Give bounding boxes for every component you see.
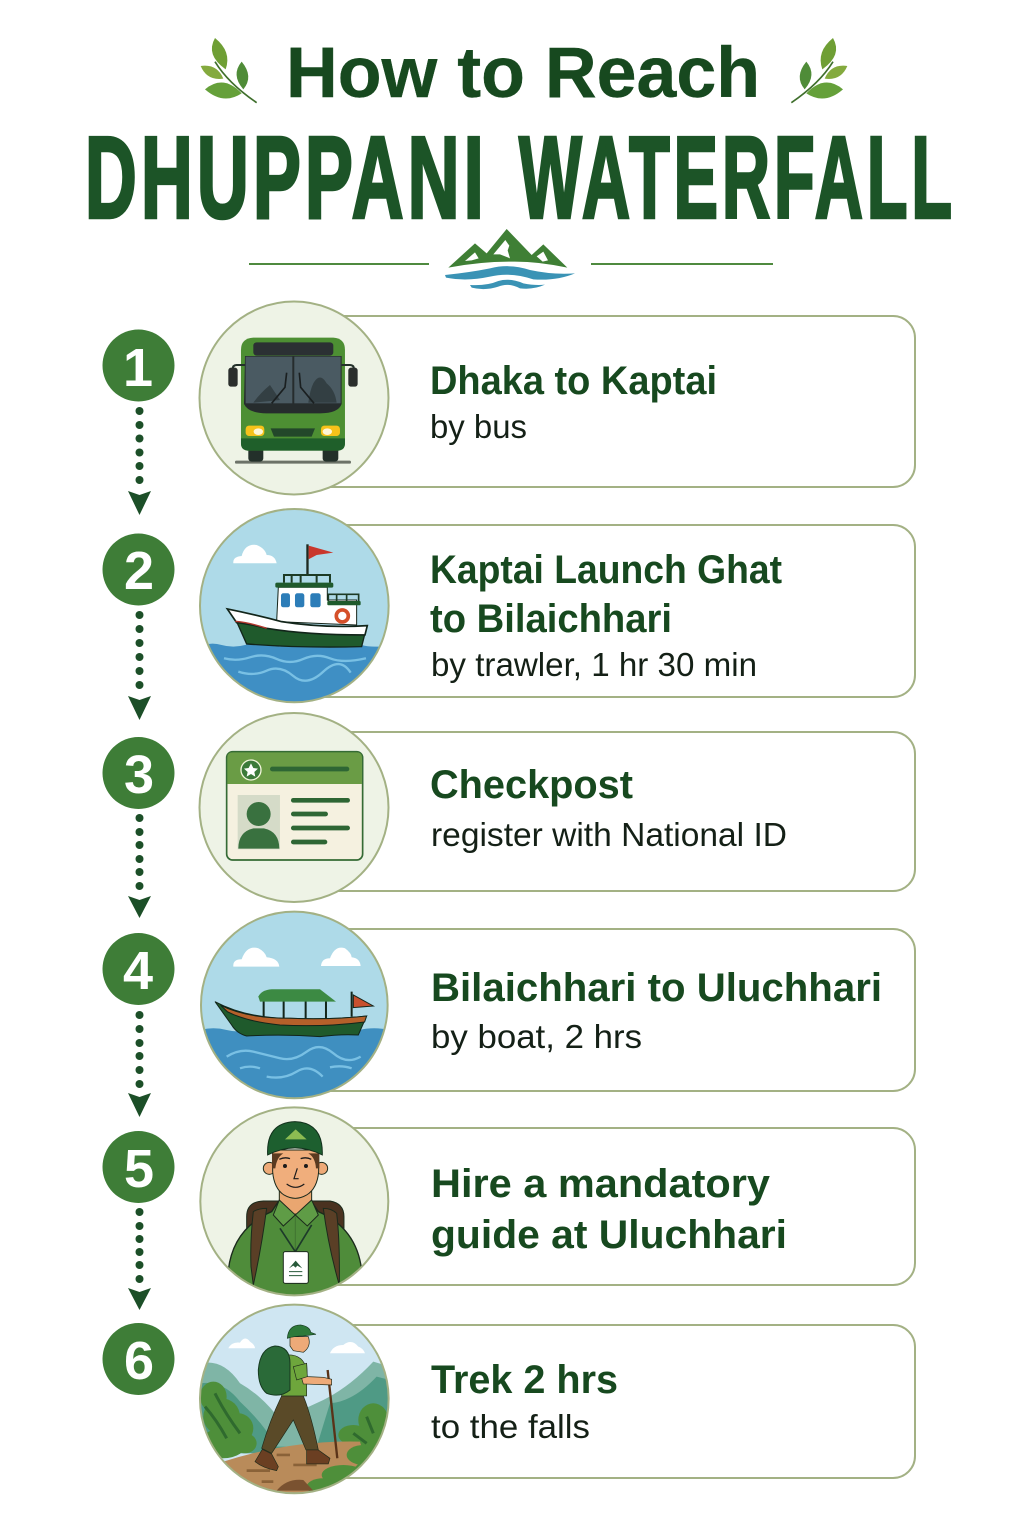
dotted arrow 4 to 5 [128,1011,151,1117]
panel: step 4 card [290,929,915,1091]
step 6 text: Trek 2 hrs [431,1358,618,1402]
step 3 [102,713,915,918]
step 3 text [430,763,787,853]
dotted arrow 1 to 2 [128,407,151,515]
number badge 3: 3 [124,745,154,805]
number badge 4 [102,933,174,1005]
step 3 text: Checkpost [430,763,633,807]
number badge 5: 5 [124,1139,154,1199]
divider with mountain and water emblem [249,229,773,289]
icon: guide with cap and badge in circle [200,1107,388,1307]
icon: right leaf sprig [791,38,847,103]
panel: step 5 card [290,1128,915,1285]
step 5 text [431,1162,787,1257]
number badge 2 [102,534,174,606]
step 5 text: guide at Uluchhari [431,1213,787,1257]
step 1 text: by bus [430,408,527,445]
number badge 6: 6 [124,1331,154,1391]
dotted arrow 5 to 6 [128,1208,151,1310]
infographic canvas [88,38,951,1494]
step 2 text: Kaptai Launch Ghat [430,548,782,592]
step 5 text: Hire a mandatory [431,1162,771,1206]
dotted arrow 2 to 3 [128,611,151,720]
step 1 [102,302,915,515]
number badge 6 [102,1323,174,1395]
step 2 text: to Bilaichhari [430,597,672,641]
step 4 text: by boat, 2 hrs [431,1018,642,1055]
number badge 1: 1 [123,338,153,398]
step 1 text: Dhaka to Kaptai [430,359,717,403]
icon: trawler on water in circle [200,509,390,707]
number badge 2: 2 [124,541,154,601]
icon: wooden boat on water in circle [200,912,390,1103]
panel: step 1 card [290,316,915,487]
icon: national ID card in circle [200,713,388,902]
step 6 text [431,1358,618,1445]
header [85,34,956,289]
panel: step 2 card [290,525,915,697]
panel: step 3 card [290,732,915,891]
icon: hiker on mountain trail in circle [200,1305,393,1497]
step 1 text [430,359,717,445]
dotted arrow 3 to 4 [128,814,151,918]
icon: left leaf sprig [201,38,257,103]
step 6 [102,1305,915,1497]
step 5 [102,1107,915,1310]
icon: green bus in circle [200,302,388,494]
step 2 text [430,548,782,683]
step 2 [102,509,915,720]
step 2 text: by trawler, 1 hr 30 min [431,646,757,683]
number badge 5 [102,1131,174,1203]
step 4 text [431,966,882,1055]
number badge 3 [102,737,174,809]
number badge 4: 4 [123,941,153,1001]
title line: How to Reach: How to Reach [286,34,760,113]
number badge 1 [102,330,174,402]
panel: step 6 card [290,1325,915,1478]
step 6 text: to the falls [431,1408,590,1445]
step 3 text: register with National ID [431,816,787,853]
step 4 text: Bilaichhari to Uluchhari [431,966,882,1010]
step 4 [102,912,915,1117]
title line: Dhuppani Waterfall: DHUPPANI [85,112,488,242]
